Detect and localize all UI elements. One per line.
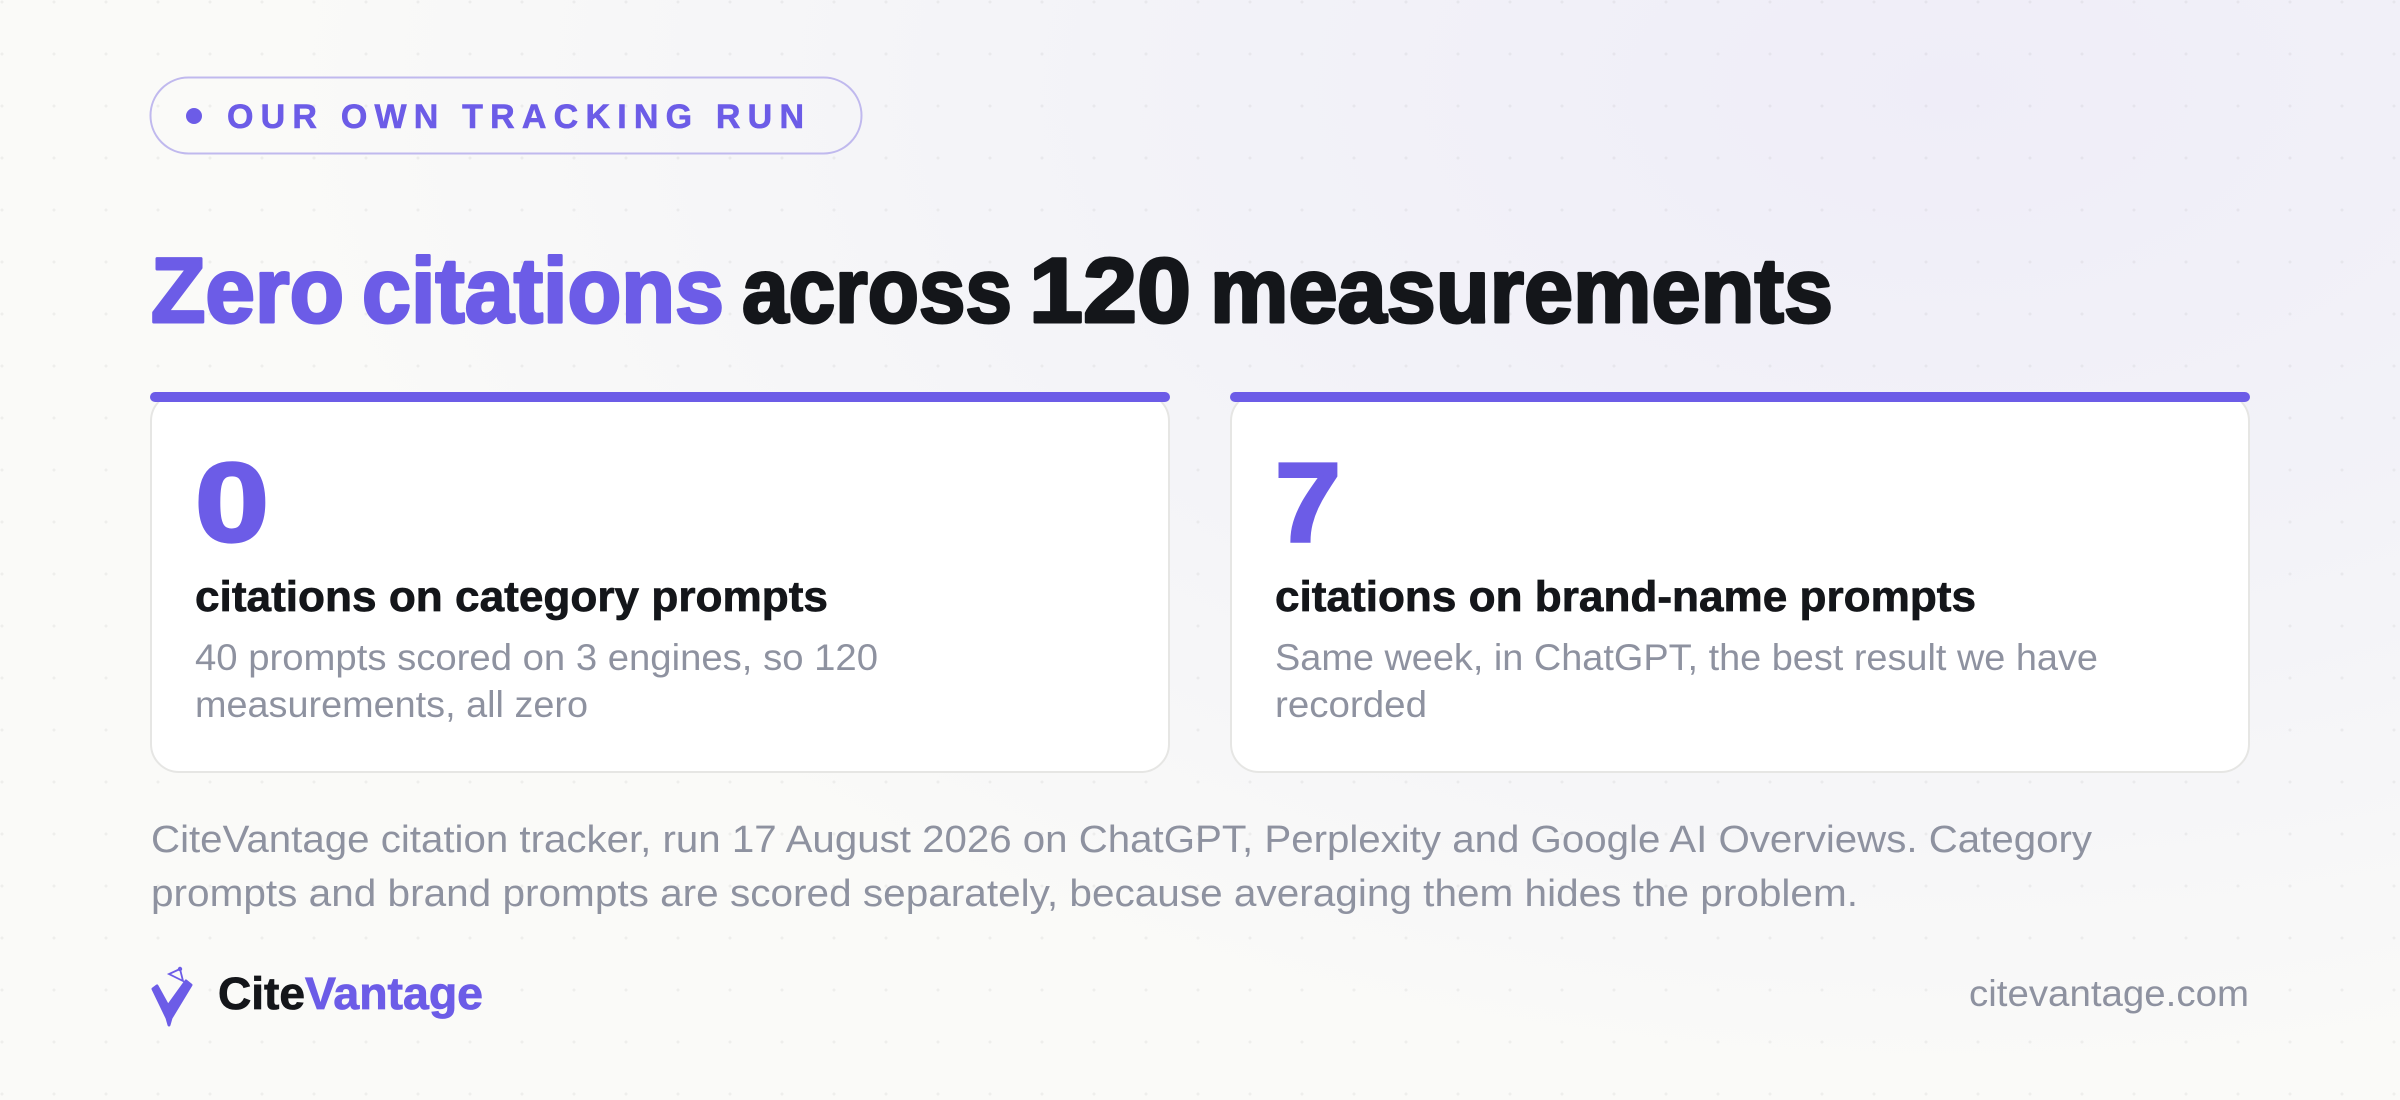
panel: brand-name prompts [1230, 392, 2250, 772]
card detail: measurements, all zero [195, 684, 588, 725]
title: citations [362, 240, 724, 342]
card accent bar [150, 392, 1170, 402]
card heading: citations on category prompts [195, 573, 828, 621]
title: measurements [1210, 240, 1833, 342]
title: 120 [1029, 240, 1191, 342]
card detail [195, 637, 878, 725]
big number 7: 7 [1275, 440, 1341, 565]
wordmark: Cite [218, 968, 305, 1019]
card detail: Same week, in ChatGPT, the best result we have [1275, 637, 2098, 678]
footnote: prompts and brand prompts are scored separately, because averaging them hides the problem. [151, 873, 1858, 915]
title: Zero [151, 240, 344, 342]
card background [151, 393, 1169, 772]
card accent bar [1230, 392, 2250, 402]
card detail: recorded [1275, 684, 1427, 725]
icon: V mark [153, 967, 191, 1025]
card detail [1275, 637, 2098, 725]
footnote: CiteVantage citation tracker, run 17 August 2026 on ChatGPT, Perplexity and Google AI Overviews. Category [151, 819, 2092, 861]
card detail: 40 prompts scored on 3 engines, so 120 [195, 637, 878, 678]
wordmark: Vantage [305, 968, 483, 1019]
panel: category prompts [150, 392, 1170, 772]
wordmark [218, 968, 483, 1019]
footnote [151, 819, 2092, 915]
brand logo [153, 967, 483, 1025]
title [151, 240, 1833, 342]
card heading: citations on brand-name prompts [1275, 573, 1976, 621]
big number 0: 0 [195, 440, 269, 565]
title: across [742, 240, 1012, 342]
website url: citevantage.com [1969, 973, 2249, 1014]
pill dot [186, 108, 202, 124]
pill label: OUR OWN TRACKING RUN [227, 98, 804, 136]
card background [1231, 393, 2249, 772]
eyebrow pill [150, 78, 862, 154]
